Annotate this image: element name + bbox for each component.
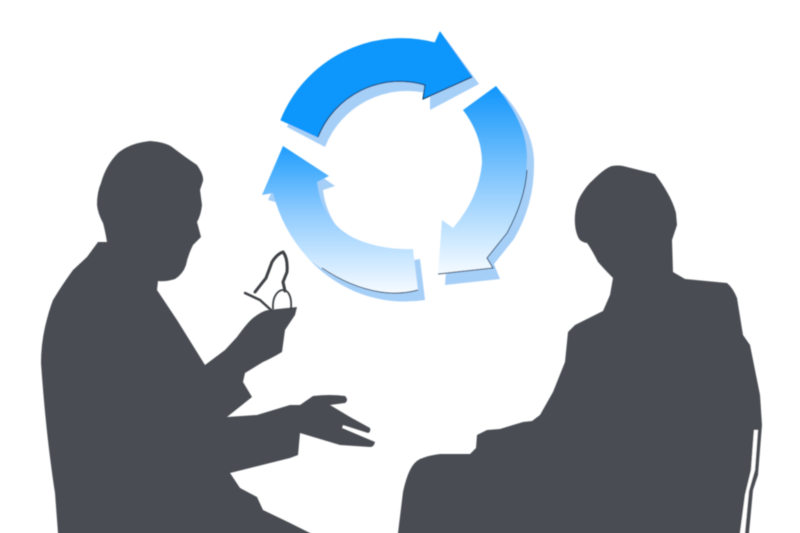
person left silhouette	[41, 141, 375, 533]
arrow: top edge line	[318, 77, 472, 137]
arrow shadows	[268, 39, 534, 302]
arrow: left	[262, 146, 418, 293]
chair gap	[739, 430, 758, 533]
person right silhouette	[397, 166, 762, 533]
arrow: top	[281, 32, 472, 137]
arrow: left edge line	[322, 268, 418, 293]
arrow: right	[438, 86, 527, 274]
icon: glasses	[245, 252, 291, 310]
arrow: right edge line	[438, 170, 527, 274]
cycle arrows	[262, 32, 534, 302]
